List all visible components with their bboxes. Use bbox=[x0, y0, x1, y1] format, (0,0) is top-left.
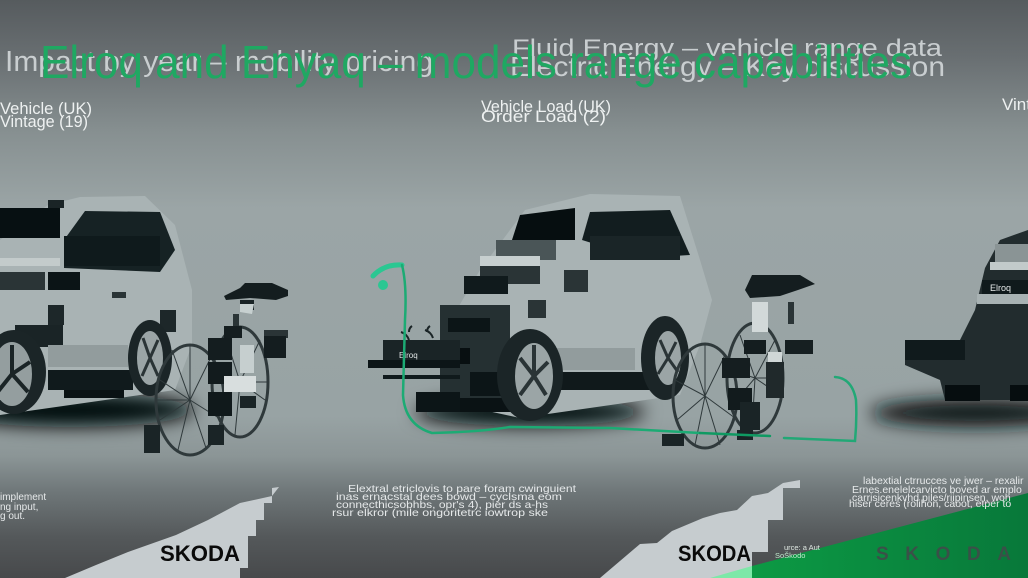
source note: urce: a Aut bbox=[784, 543, 821, 552]
car: center bbox=[440, 194, 712, 421]
body text: center: connecthicsobhbs, opr's 4), pier ds a-hs bbox=[336, 499, 548, 511]
bicycle: right bbox=[662, 275, 815, 448]
source note: SoŠkodo bbox=[775, 551, 805, 560]
car tail: center car left edge Elroq bbox=[368, 326, 460, 412]
car tail: center car left edge Elroq: Elroq bbox=[399, 351, 418, 360]
body text: right: Ernes.enelelcarvicto boved ar emplo bbox=[852, 484, 1022, 496]
logo: left SKODA: SKODA bbox=[160, 541, 240, 566]
car: far right: Elroq bbox=[990, 283, 1011, 293]
shape: left light panel bbox=[65, 487, 279, 578]
body text: left bbox=[0, 492, 46, 522]
car: far right bbox=[905, 230, 1028, 401]
body text: right: hiser ceres (rolihon, caoot, etper to bbox=[849, 498, 1011, 510]
heading: white center: Electric Energy – Key discussion bbox=[510, 51, 945, 82]
shadow: left car bbox=[0, 393, 195, 427]
heading: white center bbox=[510, 35, 945, 82]
body text: left: g out. bbox=[0, 511, 25, 522]
body text: right: labextial ctrrucces ve jwer – rexalir bbox=[863, 475, 1024, 487]
subheading: left: Vehicle (UK) bbox=[0, 99, 92, 118]
green corner bbox=[752, 493, 1028, 578]
heading: green title: Elroq and Enyaq – models range capabilities bbox=[40, 36, 912, 88]
body text: left: implement bbox=[0, 492, 46, 503]
wheel: center car front bbox=[497, 329, 563, 421]
shadow: far right car bbox=[870, 399, 1028, 427]
charging cable bbox=[373, 265, 856, 441]
body text: center bbox=[332, 483, 576, 519]
logo: green SKODA: SKODA bbox=[876, 544, 1011, 565]
shadow: center car bbox=[415, 398, 645, 426]
wheel: left car front bbox=[0, 330, 46, 414]
body text: center: Elextral etriclovis to pare foram cwinguient bbox=[348, 483, 576, 495]
body text: center: inas ernacstal dees bowd – cyclsma eom bbox=[336, 491, 562, 503]
body text: left: ng input, bbox=[0, 502, 38, 513]
body text: center: rsur elkror (mile ongoritetrc iowtrop ske bbox=[332, 507, 548, 519]
logo: right SKODA black: SKODA bbox=[678, 541, 751, 566]
subheading: center: Vehicle Load (UK) bbox=[481, 97, 611, 116]
source note bbox=[775, 543, 821, 560]
light green wedge bbox=[710, 566, 752, 578]
subheading: left bbox=[0, 99, 92, 131]
wheel: center car rear bbox=[641, 316, 689, 400]
heading: white left: Impact by year – mobility pricing bbox=[5, 46, 433, 78]
subheading: center: Order Load (2) bbox=[481, 107, 606, 126]
body text: right bbox=[849, 475, 1024, 510]
heading: white center: Fluid Energy – vehicle range data bbox=[512, 35, 943, 62]
icon: charging plug bbox=[378, 280, 388, 290]
body text: right: carrisicenkvhd piles/riipinsen, woh bbox=[852, 492, 1011, 504]
subheading: center bbox=[481, 97, 611, 126]
subheading: left: Vintage (19) bbox=[0, 112, 88, 131]
shape: right light panel bbox=[600, 480, 800, 578]
bicycle: left bbox=[144, 283, 288, 455]
wheel: left car rear bbox=[128, 320, 172, 396]
car: left bbox=[0, 196, 192, 415]
